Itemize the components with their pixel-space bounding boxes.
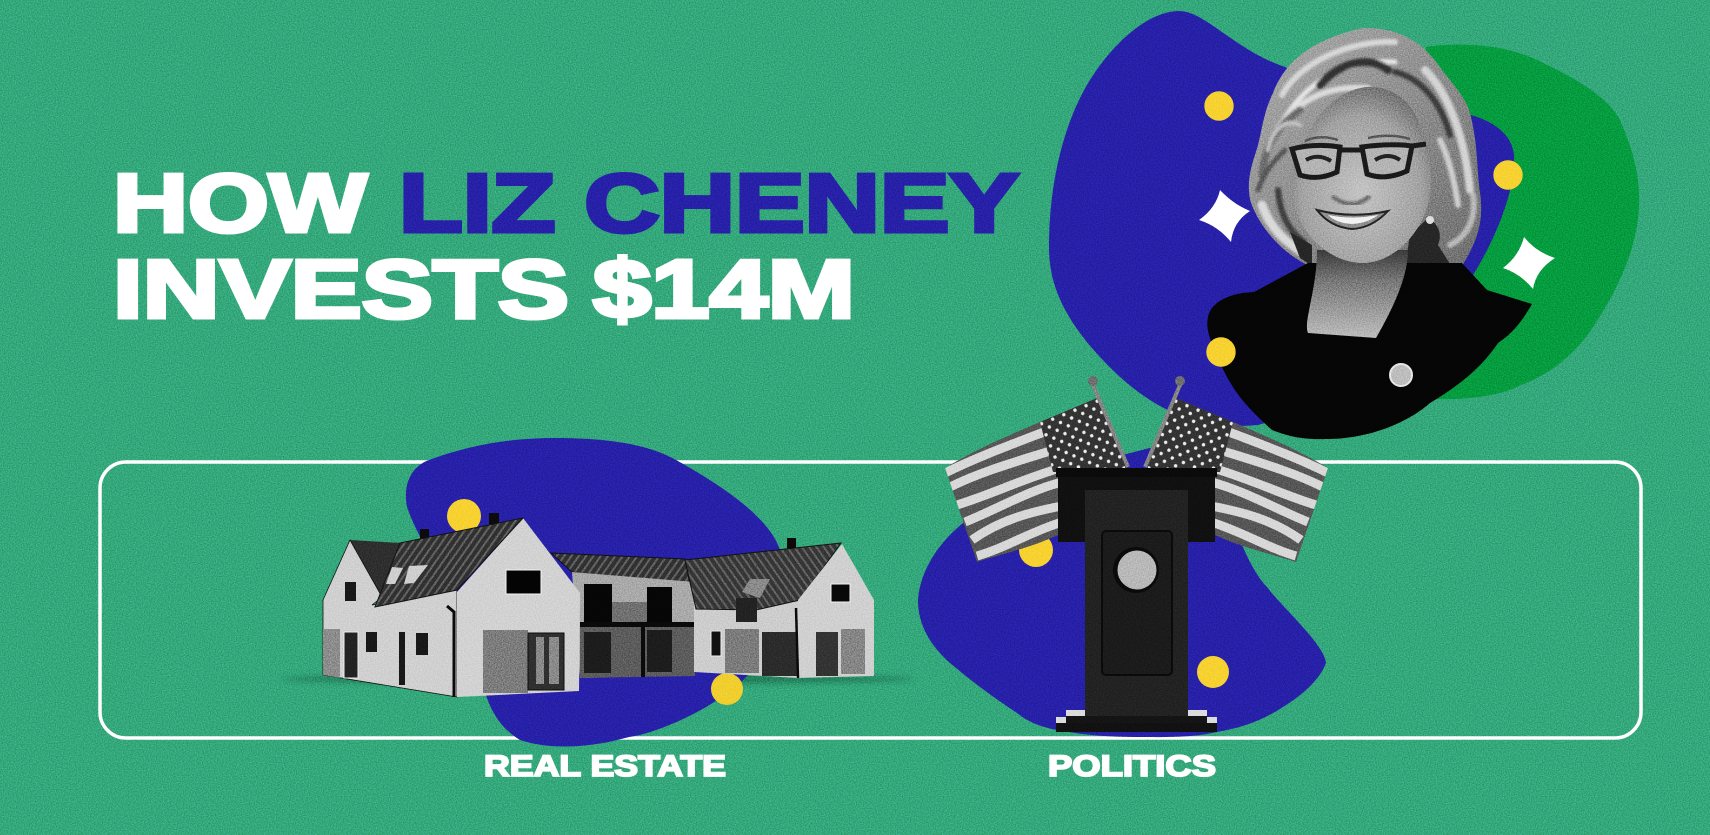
left small roof bbox=[350, 540, 401, 597]
left wing shutter bbox=[323, 629, 340, 678]
right wing door bbox=[762, 632, 798, 676]
balcony slab bbox=[580, 622, 709, 627]
main roof bbox=[375, 518, 523, 607]
label: real estate: REAL ESTATE bbox=[484, 750, 726, 783]
nose shadow bbox=[1332, 196, 1370, 204]
earring bbox=[1426, 216, 1434, 224]
portrait: Liz Cheney illustration bbox=[1207, 28, 1532, 439]
yellow dot bbox=[1493, 160, 1523, 190]
middle roof bbox=[551, 553, 690, 585]
title bbox=[113, 156, 1019, 336]
hair strands bbox=[1258, 42, 1474, 254]
yellow dot lower right bbox=[1197, 656, 1229, 688]
house shadow bbox=[282, 674, 914, 684]
title amount: $14M bbox=[593, 242, 855, 336]
face bbox=[1292, 87, 1431, 263]
yellow dot under flag bbox=[1019, 533, 1053, 567]
right drainpipe bbox=[796, 608, 798, 678]
right gable door bbox=[816, 632, 838, 676]
main shutter bbox=[483, 630, 528, 693]
left canton bbox=[1040, 398, 1125, 472]
yellow dot at house front bbox=[711, 673, 743, 705]
main roof skylights bbox=[386, 565, 428, 584]
right pole ball bbox=[1175, 376, 1185, 386]
yellow dot bbox=[1204, 91, 1234, 121]
ground floor dark openings bbox=[580, 627, 695, 678]
right flag body bbox=[1147, 398, 1328, 562]
podium top ledge bbox=[1056, 468, 1217, 477]
yellow dot behind house bbox=[447, 499, 481, 533]
left wing windows bbox=[345, 582, 428, 685]
left wing door bbox=[344, 632, 358, 678]
flag: left bbox=[945, 376, 1130, 562]
right wing wall bbox=[694, 590, 800, 678]
frame: rounded outline panel bbox=[100, 462, 1641, 738]
right gable bbox=[798, 544, 874, 678]
podium upper block bbox=[1058, 477, 1215, 542]
blob: blue behind podium bbox=[918, 447, 1326, 737]
title line 2 first word: INVESTS bbox=[113, 242, 569, 336]
teeth bbox=[1328, 215, 1378, 224]
blob: green behind portrait bbox=[1426, 45, 1639, 399]
podium base step bbox=[1066, 716, 1207, 724]
podium emblem bbox=[1113, 547, 1159, 593]
flag: right bbox=[1143, 376, 1328, 562]
label: politics: POLITICS bbox=[1048, 750, 1216, 783]
main door bbox=[528, 633, 564, 690]
left flag pole bbox=[1093, 385, 1128, 467]
jacket bbox=[1207, 263, 1532, 439]
eyes bbox=[1306, 156, 1400, 161]
right roof bbox=[685, 543, 841, 610]
upper doors bbox=[584, 584, 672, 624]
mouth bbox=[1317, 210, 1388, 229]
right canton bbox=[1148, 398, 1233, 472]
yellow dots around podium bbox=[1019, 533, 1229, 688]
left flag body bbox=[945, 398, 1126, 562]
glasses bbox=[1292, 144, 1426, 177]
main front gable bbox=[457, 518, 580, 697]
decorations: portrait dots and sparkles bbox=[1199, 91, 1555, 367]
title line 1 white: HOW bbox=[113, 156, 368, 250]
right dormer bbox=[736, 598, 757, 622]
left gable wall bbox=[323, 540, 457, 697]
sparkle bbox=[1199, 190, 1250, 242]
right flag pole bbox=[1145, 385, 1180, 467]
house illustration bbox=[323, 513, 874, 697]
main gable window bbox=[506, 570, 541, 594]
balcony railing bbox=[612, 602, 647, 624]
yellow dot bbox=[1206, 337, 1236, 367]
blob: blue behind house bbox=[406, 438, 783, 746]
blob: blue behind portrait bbox=[1049, 11, 1514, 426]
left pole ball bbox=[1088, 376, 1098, 386]
chimneys bbox=[420, 513, 796, 558]
eyebrows bbox=[1305, 136, 1410, 141]
middle wall bbox=[572, 572, 695, 678]
neck bbox=[1307, 250, 1408, 338]
podium bbox=[1056, 468, 1217, 732]
main door panes bbox=[536, 637, 559, 684]
right wing shutters bbox=[725, 629, 759, 673]
podium panel bbox=[1102, 531, 1172, 675]
podium base bbox=[1056, 723, 1217, 732]
hair bbox=[1249, 28, 1481, 266]
sparkle bbox=[1503, 237, 1555, 289]
podium white step highlights bbox=[1056, 710, 1217, 723]
right wing small window bbox=[711, 631, 721, 656]
dark hair shadow by neck bbox=[1290, 218, 1450, 266]
right gable window bbox=[831, 584, 850, 602]
title highlighted name: LIZ CHENEY bbox=[399, 156, 1019, 250]
lapel pin bbox=[1390, 364, 1412, 386]
main drainpipe bbox=[447, 606, 454, 697]
podium column bbox=[1085, 490, 1188, 718]
right gable shutter bbox=[841, 629, 865, 674]
